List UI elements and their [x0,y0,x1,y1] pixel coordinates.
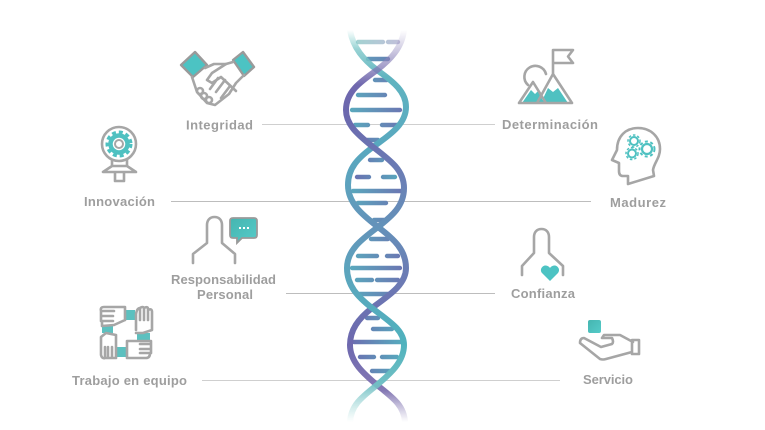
label: Determinación: Determinación [502,117,598,132]
label: Integridad: Integridad [186,118,253,132]
label: Responsabilidad Personal [171,272,276,302]
Integridad group [181,52,254,132]
icon: person [193,217,235,263]
connector line: Responsabilidad Personal to Confianza [286,292,495,294]
label: Servicio: Servicio [583,372,633,387]
connector line: Trabajo en equipo to Servicio [202,380,560,382]
icon: mountains with flag [519,50,573,103]
icon: speech bubble [230,218,257,243]
DNA strand: teal to purple [348,30,406,422]
label: Confianza: Confianza [511,286,576,301]
connector line: Integridad to Determinación [262,124,495,126]
label: Responsabilidad Personal: Responsabilidad [171,272,276,287]
Trabajo en equipo group [72,307,187,388]
label: Innovación: Innovación [84,194,155,209]
Madurez group [610,128,666,210]
Responsabilidad Personal group [171,217,276,302]
icon: light bulb with gear [102,127,136,181]
DNA double helix [346,30,406,422]
connector line: Innovación to Madurez [171,200,591,202]
icon: handshake [181,52,254,105]
label: Madurez: Madurez [610,195,666,210]
Confianza group [511,229,576,301]
DNA rungs [352,42,402,371]
Innovación group [84,127,155,209]
icon: person with heart [522,229,563,281]
Servicio group [580,320,639,387]
label: Trabajo en equipo: Trabajo en equipo [72,373,187,388]
icon: hand with square [580,320,639,360]
Determinación group [502,50,598,132]
label: Responsabilidad Personal: Personal [197,287,253,302]
icon: head with gears [612,128,660,184]
DNA strand: purple to teal [346,30,404,422]
icon: team hands [101,307,152,358]
